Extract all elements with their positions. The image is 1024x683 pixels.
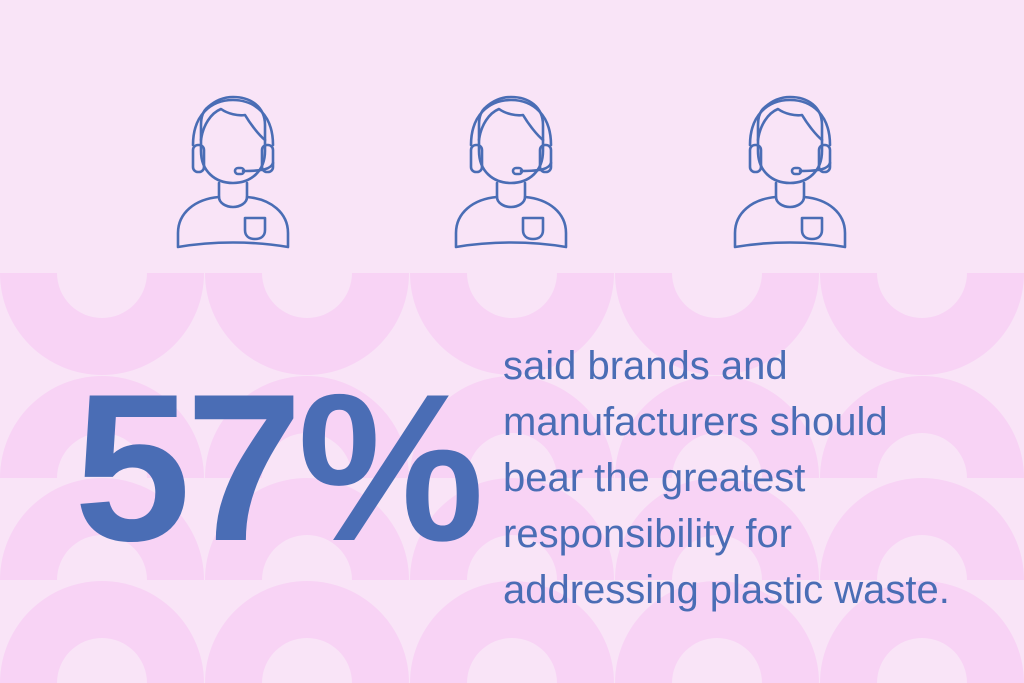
icon: agent 2: [456, 97, 566, 247]
icon: agent 3: [735, 97, 845, 247]
icons row: [176, 96, 846, 248]
description text: manufacturers should: [503, 400, 888, 444]
description text: [503, 344, 950, 612]
background pattern: [0, 273, 1024, 683]
description text: said brands and: [503, 344, 788, 388]
description text: responsibility for: [503, 512, 792, 556]
description text: bear the greatest: [503, 456, 805, 500]
icon: agent 1: [178, 97, 288, 247]
big stat 57%: 57%: [74, 350, 479, 585]
description text: addressing plastic waste.: [503, 568, 950, 612]
